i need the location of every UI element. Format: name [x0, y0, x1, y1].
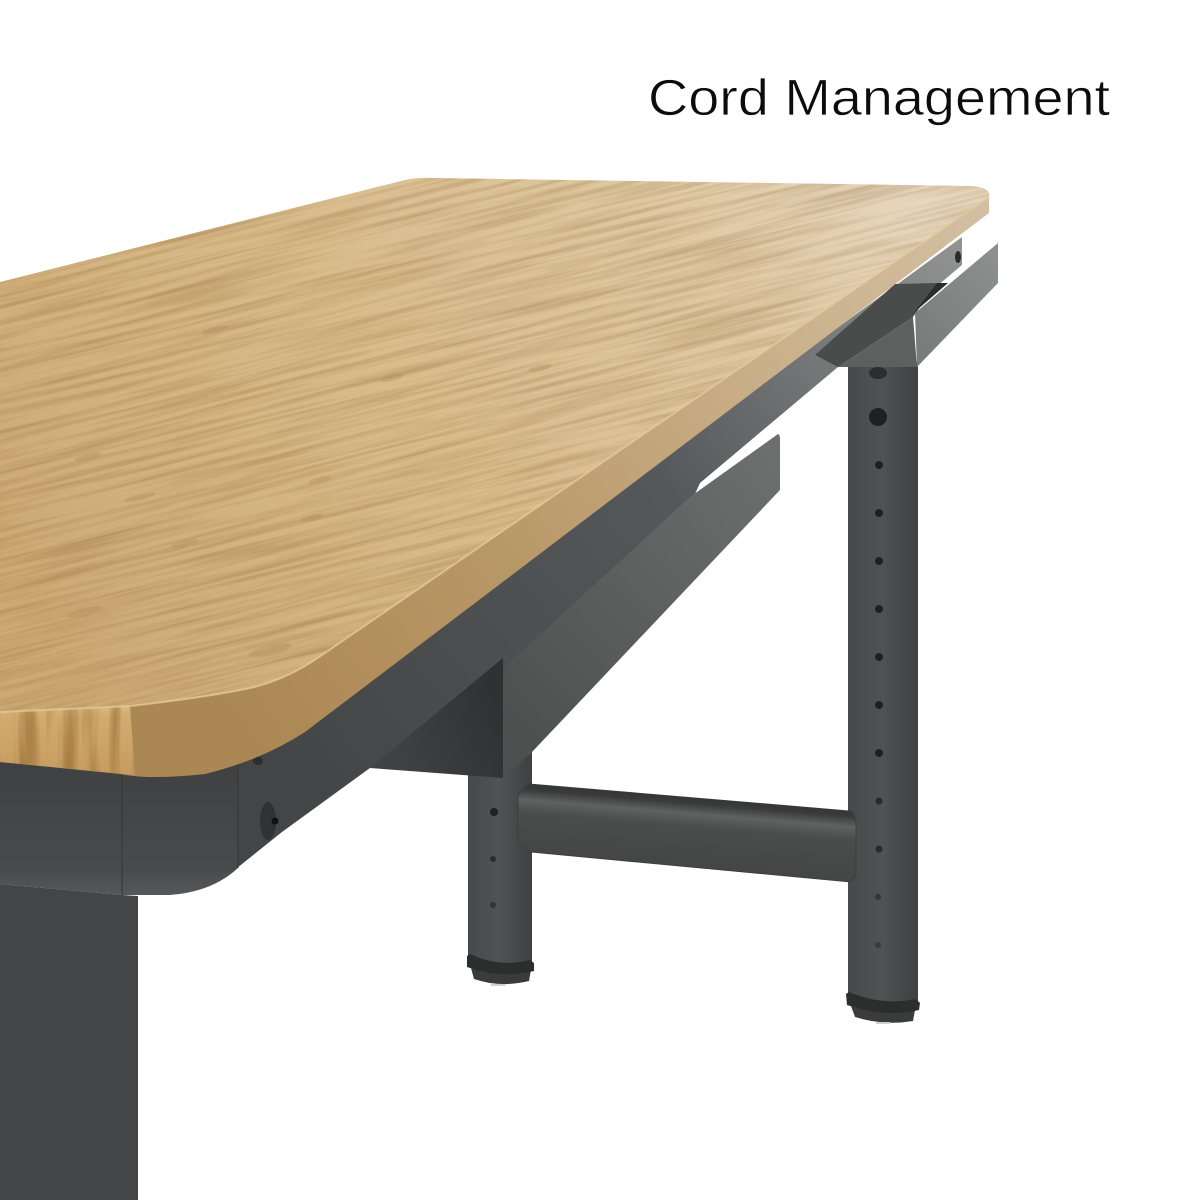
cord tray front plate [503, 434, 780, 778]
foot, right leg [846, 992, 920, 1024]
desk frame end cap [0, 755, 278, 895]
rail bolt [955, 251, 961, 263]
tabletop [0, 178, 990, 777]
tabletop end grain [0, 706, 135, 775]
under-desk rail [228, 237, 962, 872]
bamboo knots [67, 324, 552, 660]
front column leg [0, 884, 138, 1200]
right cord tray plate [915, 243, 998, 367]
bamboo grain [0, 178, 990, 711]
adjustment holes, right leg [869, 367, 887, 948]
right tray slot [913, 283, 948, 314]
title: Cord Management [648, 69, 1110, 126]
right bracket [838, 317, 917, 367]
cord tray underside [370, 658, 503, 778]
tabletop surface [0, 178, 989, 712]
shadow under tabletop at bracket [815, 283, 937, 367]
cap side bolt [253, 757, 278, 840]
rear right leg [846, 362, 920, 1024]
adjustment holes, left leg [490, 808, 498, 908]
crossbar between rear legs [518, 784, 856, 882]
foot, left leg [467, 954, 534, 986]
rear left leg [467, 745, 534, 986]
highlight on rounded corner [0, 197, 989, 712]
tabletop front edge [0, 197, 989, 777]
